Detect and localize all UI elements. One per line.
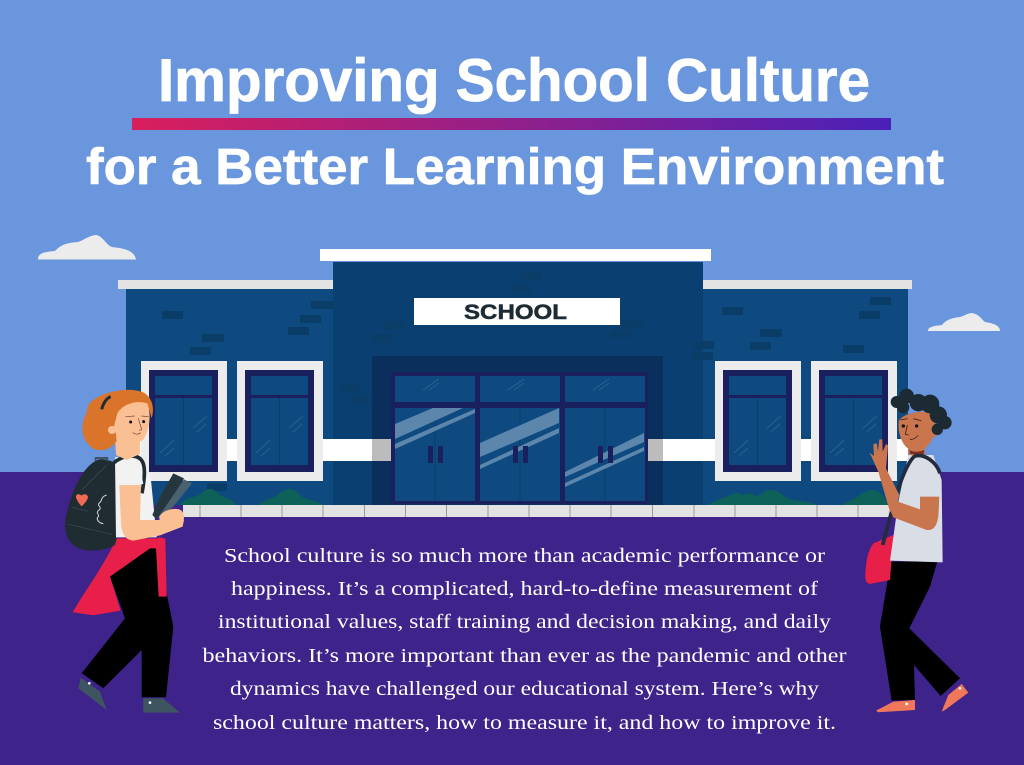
cloud left: [38, 235, 136, 260]
shoes: [78, 678, 107, 710]
central block: [333, 262, 703, 505]
school building: [118, 249, 912, 517]
strap: [114, 456, 144, 493]
intro paragraph: [202, 545, 847, 734]
neck: [115, 435, 140, 460]
title line 2: for a Better Learning Environment: [86, 138, 944, 195]
gradient divider: [132, 118, 891, 130]
purple ground: [0, 472, 1024, 765]
book: [152, 473, 184, 519]
boy pants: [880, 562, 960, 701]
shirt: [890, 455, 943, 562]
jacket tied at waist: [73, 538, 167, 615]
girl with backpack: [65, 390, 192, 713]
left wing roof: [118, 280, 333, 289]
entrance: [372, 356, 663, 505]
intro paragraph: institutional values, staff training and decision making, and daily: [218, 611, 831, 633]
intro paragraph: school culture matters, how to measure it, and how to improve it.: [213, 712, 836, 734]
hair: [82, 390, 153, 450]
sidewalk: [183, 505, 890, 517]
red bag: [865, 535, 893, 584]
shoes: [876, 700, 915, 712]
right wing roof: [703, 280, 912, 289]
head face: [114, 402, 150, 443]
strap: [883, 456, 940, 545]
arm: [119, 485, 184, 541]
hair tie: [102, 397, 111, 409]
intro paragraph: dynamics have challenged our educational system. Here’s why: [230, 678, 819, 700]
far arm and hand: [869, 439, 899, 512]
windows: [141, 361, 897, 481]
right wing: [703, 289, 908, 505]
hair: [891, 389, 952, 435]
torso shirt: [115, 454, 157, 537]
boy waving: [865, 389, 968, 712]
sky background: [0, 0, 1024, 472]
hand: [159, 509, 184, 530]
cloud right: [928, 313, 1000, 331]
school sign: SCHOOL: [464, 301, 567, 324]
central roof: [320, 249, 711, 261]
left wing: [126, 289, 333, 505]
bricks: [162, 272, 891, 491]
school sign: [414, 298, 620, 325]
near arm: [889, 497, 939, 530]
white band: [126, 439, 908, 461]
sleeve: [117, 460, 143, 485]
pants: [82, 547, 173, 697]
title line 1: Improving School Culture: [158, 47, 870, 114]
head: [899, 412, 936, 451]
intro paragraph: happiness. It’s a complicated, hard-to-define measurement of: [231, 578, 818, 600]
backpack: [65, 458, 121, 551]
neck: [908, 443, 925, 457]
intro paragraph: School culture is so much more than academic performance or: [224, 545, 825, 567]
intro paragraph: behaviors. It’s more important than ever as the pandemic and other: [202, 645, 847, 667]
bushes: [180, 489, 889, 505]
